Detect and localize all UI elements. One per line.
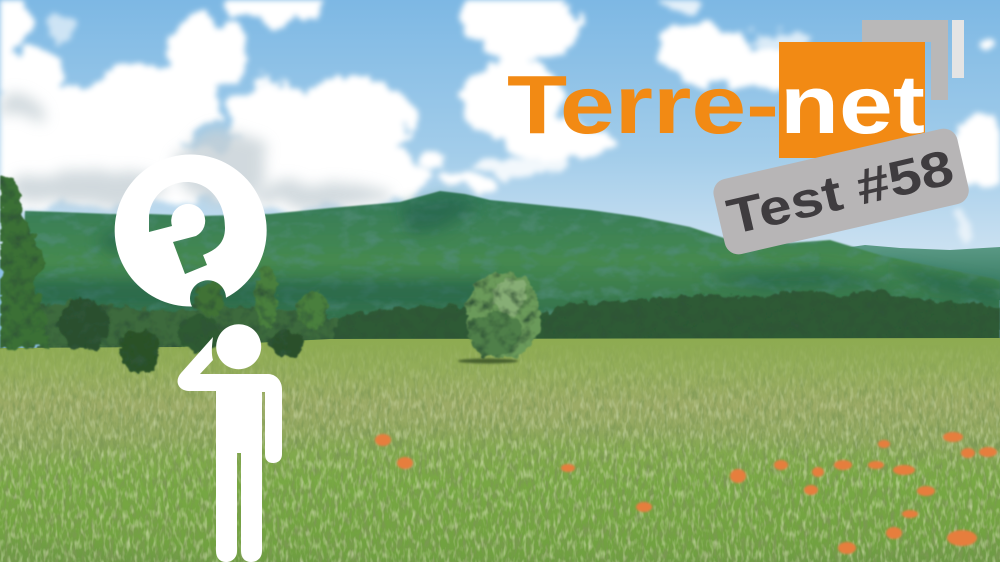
badge text: Test #58 (722, 139, 959, 245)
tree on far left (0, 176, 50, 348)
logo word Terre-: Terre- (507, 58, 779, 151)
person head (216, 324, 261, 369)
distant treeline (40, 290, 1000, 355)
person body with raised arm and legs (178, 337, 282, 562)
logo word net: net (780, 58, 925, 151)
grass texture: dark blades (0, 345, 1000, 562)
badge: Test #58 (711, 126, 972, 257)
logo grey L-shaped corner (862, 20, 948, 100)
centre tree shadow (458, 358, 518, 364)
grass texture: light blades (0, 345, 1000, 562)
logo orange square (779, 42, 925, 158)
bright grass band (0, 438, 1000, 562)
clouds: left cluster (0, 0, 491, 210)
mountain shadows (20, 195, 1000, 305)
logo light grey bar (952, 20, 964, 78)
foreground bushes and trees on the left (0, 176, 329, 373)
grass texture (0, 345, 1000, 562)
clouds: grey undersides (0, 100, 390, 209)
orange lily flowers (375, 432, 997, 554)
far mountains (830, 245, 1000, 300)
badge background (711, 126, 972, 257)
main mountain range (20, 191, 1000, 330)
icon: question mark speech bubble (115, 155, 267, 307)
centre tree (466, 271, 540, 359)
meadow (0, 338, 1000, 562)
sky (0, 0, 1000, 260)
logo: Terre-net (507, 20, 964, 158)
icon: thinking person (178, 324, 282, 562)
clouds: centre and right (463, 0, 1000, 242)
